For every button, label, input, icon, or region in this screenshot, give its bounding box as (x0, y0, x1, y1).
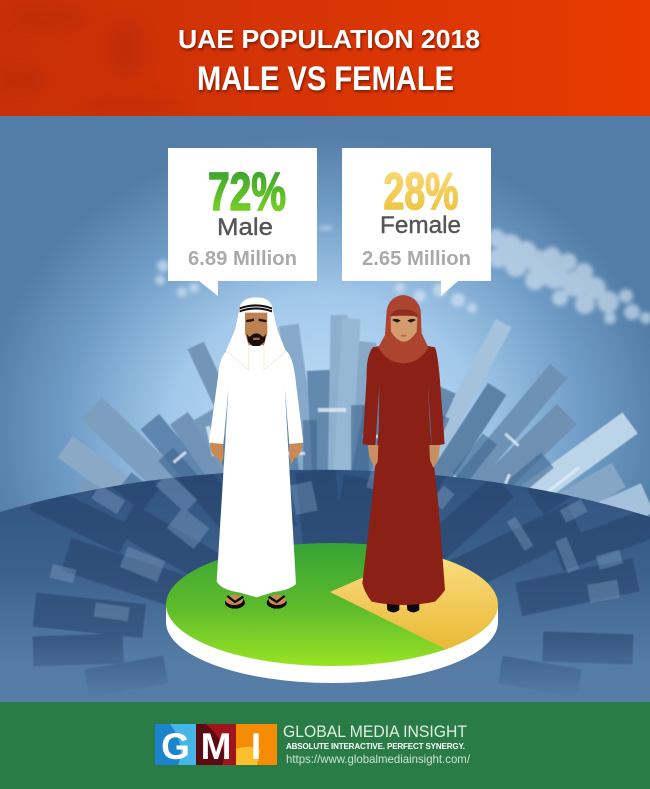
male label: Male (217, 214, 273, 241)
header banner (0, 0, 650, 116)
robe (209, 351, 303, 597)
agal (240, 304, 272, 312)
logo: GMI (155, 724, 277, 767)
headcloth (226, 297, 286, 370)
pie chart (166, 543, 498, 683)
male population: 6.89 Million (188, 248, 297, 270)
female percentage: 28% (384, 163, 458, 221)
male percentage: 72% (208, 162, 286, 222)
eyes (392, 319, 416, 323)
title: MALE VS FEMALE (197, 60, 454, 98)
sandals (225, 597, 245, 609)
hands (210, 442, 303, 465)
logo: GMI: G (161, 726, 190, 767)
hands (368, 445, 440, 468)
figure: woman in abaya (362, 295, 445, 612)
company name and tagline: ABSOLUTE INTERACTIVE. PERFECT SYNERGY. (286, 742, 465, 751)
background: sky (0, 116, 650, 702)
abaya (362, 344, 445, 605)
dark globe lens (0, 470, 650, 702)
hijab (378, 295, 428, 363)
shoes (387, 603, 419, 612)
company name and tagline: https://www.globalmediainsight.com/ (286, 752, 471, 766)
skyline detail (122, 404, 554, 488)
pie slice: female 28% (330, 552, 498, 649)
logo: GMI: M (201, 726, 231, 767)
title: UAE POPULATION 2018 (178, 24, 480, 54)
beard (247, 333, 266, 346)
city skyline radiating from the globe (58, 314, 650, 516)
company name and tagline (283, 722, 471, 766)
female label: Female (380, 212, 461, 239)
eyes (246, 319, 267, 322)
callout: female (342, 148, 491, 296)
face (391, 316, 417, 342)
footer band (0, 702, 650, 789)
figure: man in kandura (209, 297, 303, 609)
under scarf (390, 309, 419, 317)
logo: GMI: I (251, 726, 261, 767)
pie base (166, 604, 498, 683)
female population: 2.65 Million (362, 248, 471, 270)
mouth (401, 334, 407, 337)
clouds (155, 226, 650, 324)
company name and tagline: GLOBAL MEDIA INSIGHT (283, 722, 467, 741)
title (178, 24, 480, 98)
face (245, 313, 267, 345)
pie slice: male 72% (166, 543, 498, 666)
callout: male (168, 148, 317, 296)
